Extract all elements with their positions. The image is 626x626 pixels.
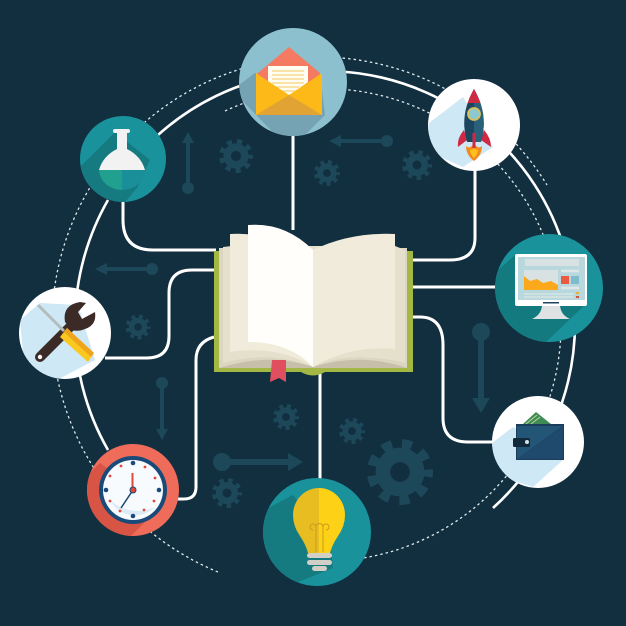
background arrows [95,132,490,471]
icon: mail [239,28,347,136]
middle pages [223,246,405,367]
icon: rocket [425,79,520,171]
icon: wallet [492,396,584,488]
left page [230,234,313,367]
icon: monitor [490,234,603,345]
right page [313,234,395,367]
icon: flask [80,116,166,202]
bookmark [270,360,286,382]
bottom page shade [219,360,407,368]
connector lines [105,130,498,499]
book [214,225,413,382]
icon: clock [87,444,179,536]
solid orbit [75,71,575,508]
back pages [219,248,407,368]
flipping white page [248,225,313,367]
background gears [127,141,430,506]
book cover [214,251,413,376]
icon: tools [19,287,111,380]
icon: light bulb [263,478,371,586]
outer dashed orbit [52,57,547,572]
inner dashed orbit [225,89,561,558]
